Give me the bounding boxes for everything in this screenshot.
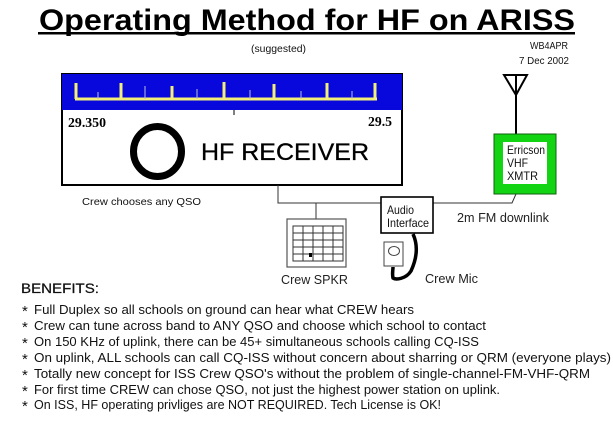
benefits list: For first time CREW can chose QSO, not just the highest power station on uplink. [34, 382, 500, 397]
benefits list: * [22, 383, 28, 400]
icon: tuning knob [134, 126, 182, 176]
heading: benefits: BENEFITS: [21, 280, 99, 296]
benefits list: * [22, 351, 28, 368]
panel: HF receiver [62, 74, 402, 185]
icon: crew microphone [384, 234, 416, 279]
panel: audio interface: Interface [387, 216, 429, 230]
author and date: 7 Dec 2002 [519, 55, 569, 67]
benefits list: Crew can tune across band to ANY QSO and choose which school to contact [34, 318, 486, 333]
benefits list: * [22, 398, 28, 415]
caption: crew chooses: Crew chooses any QSO [82, 196, 201, 208]
benefits list [22, 302, 611, 415]
author and date: WB4APR [530, 40, 568, 52]
frequency label low: 29.350 [68, 115, 106, 130]
downlink label: 2m FM downlink [457, 210, 549, 225]
icon: antenna [504, 75, 527, 134]
title: Operating Method for HF on ARISS [39, 4, 575, 37]
benefits list: * [22, 335, 28, 352]
benefits list: * [22, 367, 28, 384]
receiver label: HF RECEIVER [201, 139, 369, 166]
frequency label high: 29.5 [368, 114, 392, 129]
author and date [519, 40, 569, 67]
benefits list: Full Duplex so all schools on ground can hear what CREW hears [34, 302, 415, 317]
subtitle: suggested: (suggested) [251, 43, 306, 55]
benefits list: On 150 KHz of uplink, there can be 45+ simultaneous schools calling CQ-ISS [34, 334, 479, 349]
panel: audio interface [381, 197, 433, 233]
panel: VHF transmitter: XMTR [507, 169, 538, 183]
benefits list: * [22, 303, 28, 320]
label: crew speaker: Crew SPKR [281, 272, 348, 287]
benefits list: * [22, 319, 28, 336]
panel: VHF transmitter: Erricson [507, 143, 545, 157]
panel: audio interface: Audio [387, 203, 414, 217]
benefits list: On uplink, ALL schools can call CQ-ISS without concern about sharring or QRM (everyone plays) [34, 350, 611, 365]
label: crew mic: Crew Mic [425, 271, 478, 286]
tuning dial band [62, 74, 402, 110]
panel: VHF transmitter: VHF [507, 156, 528, 170]
benefits list: On ISS, HF operating privliges are NOT REQUIRED. Tech License is OK! [34, 397, 441, 412]
panel: VHF transmitter [494, 134, 556, 194]
wiring [278, 185, 516, 219]
benefits list: Totally new concept for ISS Crew QSO's without the problem of single-channel-FM-VHF-QRM [34, 366, 590, 381]
icon: crew speaker [287, 219, 346, 267]
